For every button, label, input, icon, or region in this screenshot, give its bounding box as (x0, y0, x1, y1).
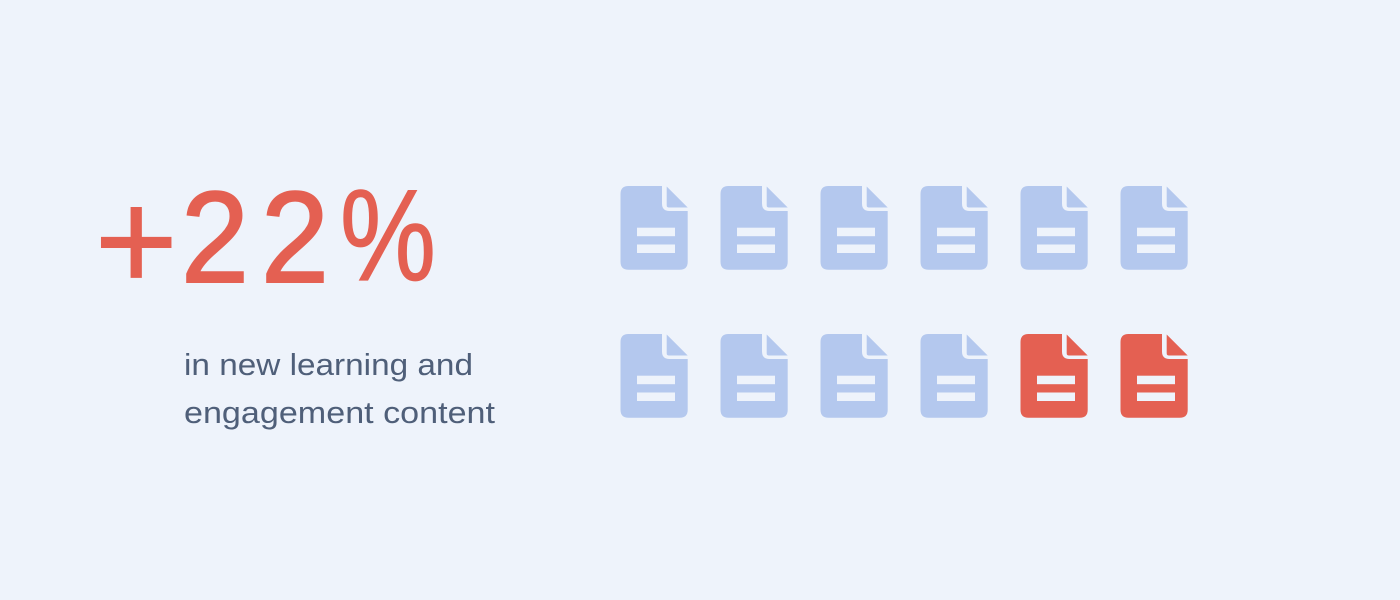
description text: in new learning and (184, 347, 473, 382)
headline statistic: +22%: 2 (181, 165, 249, 310)
bottom row: blue document icons (620, 334, 988, 418)
bottom row: highlighted red document icons (1020, 334, 1188, 418)
headline statistic: +22% (94, 162, 436, 321)
icon grid: twelve documents, two highlighted (620, 186, 1188, 418)
description text: engagement content (184, 395, 495, 430)
headline statistic: +22%: 2 (261, 165, 329, 310)
top row of document icons (620, 186, 1188, 270)
headline statistic: +22%: % (340, 164, 436, 308)
description text (184, 347, 495, 430)
headline statistic: +22%: + (94, 162, 178, 321)
